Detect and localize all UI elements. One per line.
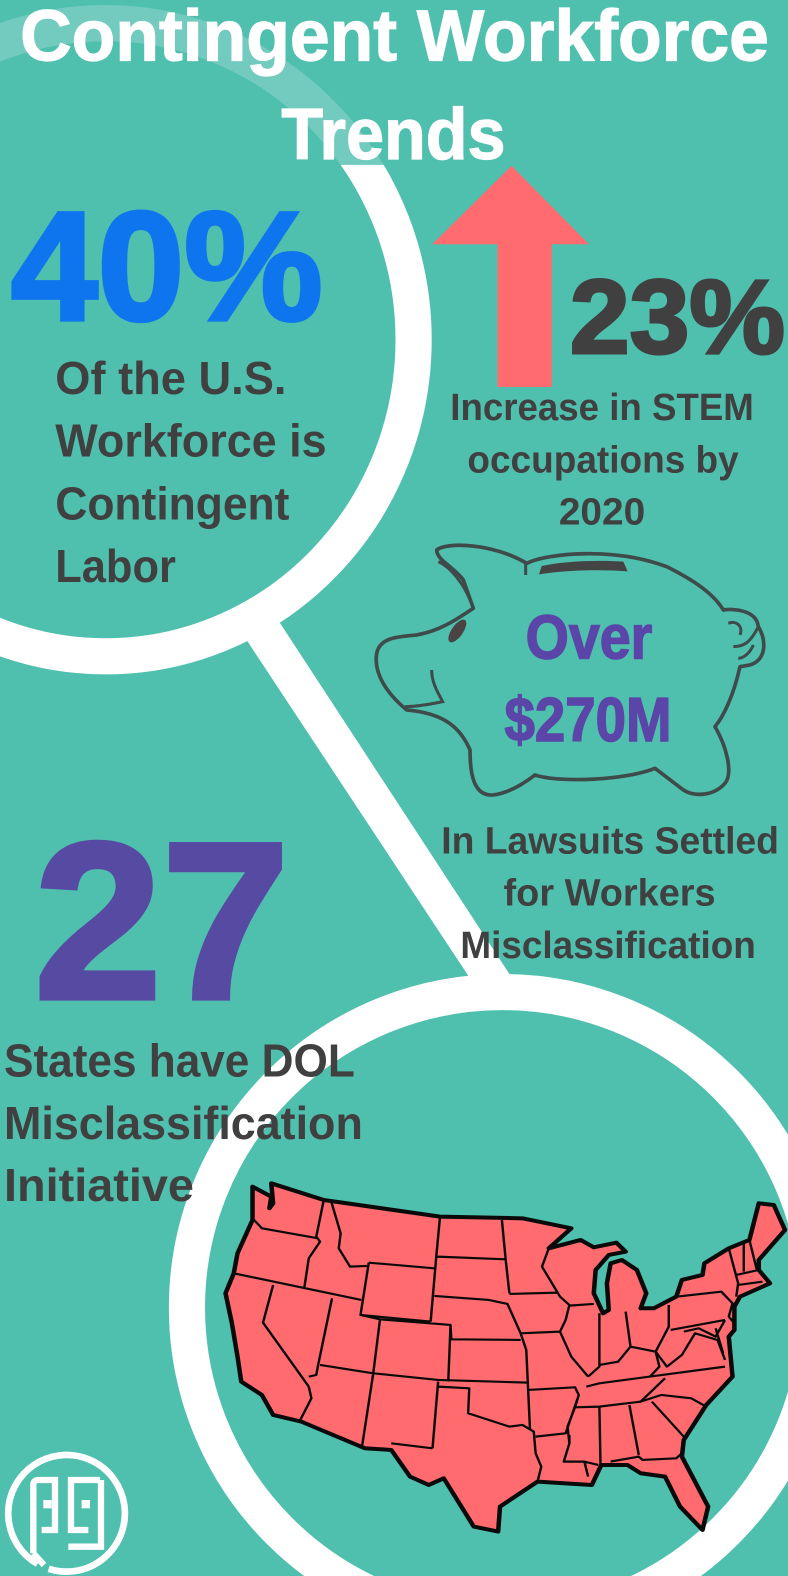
stat: 40% contingent labor [11, 180, 327, 592]
icon: US map [226, 1183, 785, 1532]
icon: piggy bank [376, 545, 764, 795]
lower circle ring [187, 992, 788, 1576]
stat: 40% contingent labor: Of the U.S. [55, 352, 286, 404]
stat: 23% STEM: occupations by [467, 438, 739, 481]
text: lawsuits settled: In Lawsuits Settled [441, 819, 779, 862]
upper circle ring [0, 23, 414, 656]
stat: over $270M [505, 603, 671, 755]
title: Trends [281, 94, 506, 175]
stat: 40% contingent labor: 40% [11, 180, 323, 353]
icon: up arrow [432, 166, 589, 387]
stat: 23% STEM: Increase in STEM [450, 386, 754, 429]
icon: PG logo [8, 1455, 125, 1572]
stat: over $270M: Over [526, 603, 652, 672]
stat: 27 states: States have DOL [4, 1034, 355, 1086]
stat: 27 states: Misclassification [4, 1097, 363, 1149]
stat: 23% STEM: 2020 [559, 491, 645, 534]
stat: 40% contingent labor: Workforce is [55, 414, 327, 466]
stat: 23% STEM [450, 259, 785, 534]
text: lawsuits settled [441, 819, 779, 967]
stat: 40% contingent labor: Labor [55, 540, 176, 592]
stat: 27 states: Initiative [4, 1159, 194, 1211]
stat: 27 states [4, 797, 363, 1211]
title [20, 0, 769, 175]
stat: 27 states: 27 [34, 797, 289, 1046]
connector line [247, 622, 517, 985]
stat: 40% contingent labor: Contingent [55, 478, 289, 530]
stat: 23% STEM: 23% [570, 259, 785, 376]
stat: over $270M: $270M [505, 686, 671, 755]
text: lawsuits settled: for Workers [504, 872, 716, 915]
text: lawsuits settled: Misclassification [460, 924, 756, 967]
